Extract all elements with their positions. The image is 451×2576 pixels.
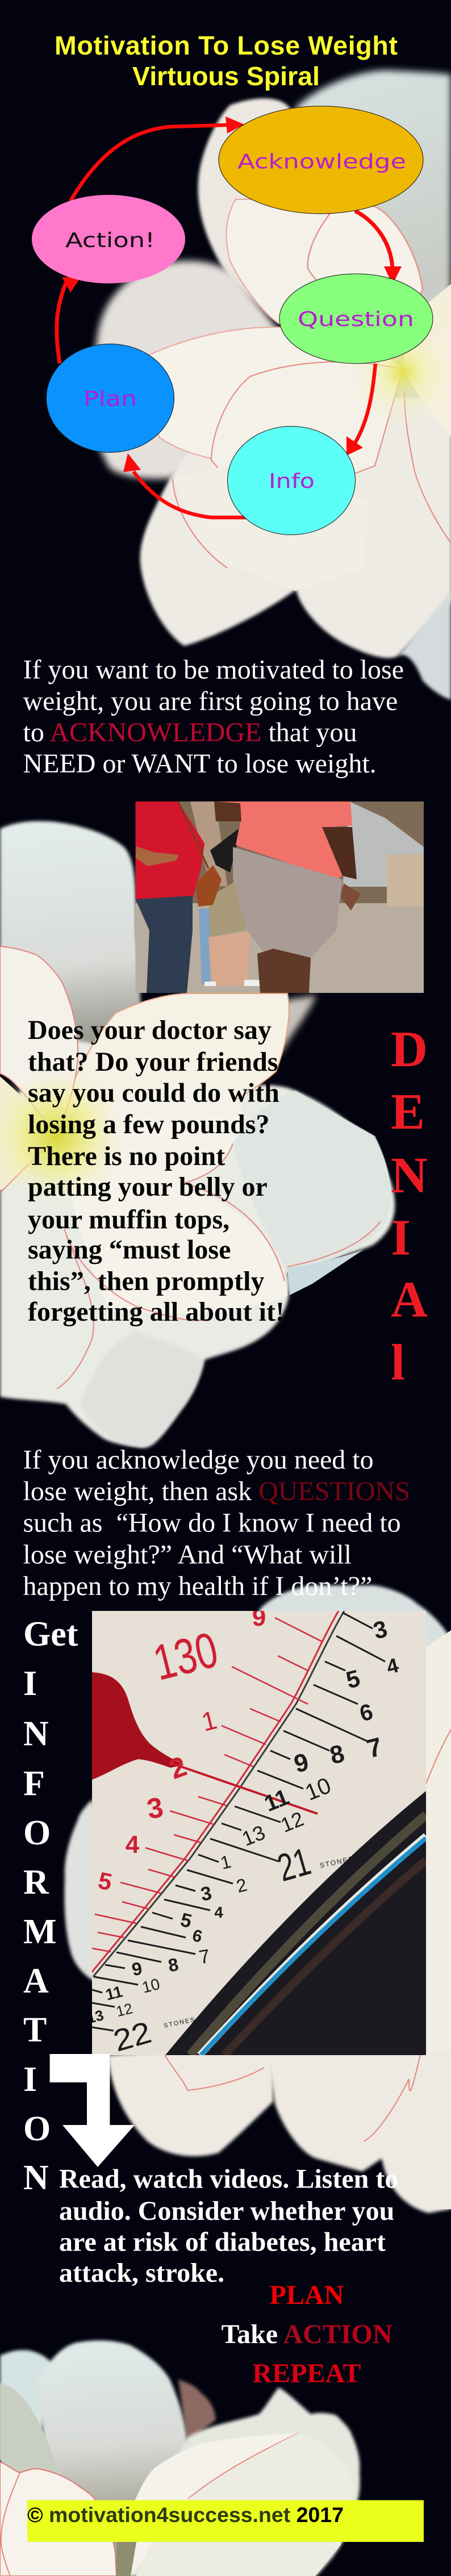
text block: questions: If you acknowledge you need to: [23, 1445, 374, 1475]
node: action: [32, 195, 185, 283]
dial numbers: 8: [327, 1739, 347, 1770]
dial numbers: 2: [234, 1874, 249, 1897]
vertical word: denial: A: [391, 1272, 428, 1328]
text block: denial questions: There is no point: [28, 1141, 225, 1171]
text block: questions: lose weight, then ask QUESTIONS: [23, 1476, 410, 1506]
title: Motivation To Lose Weight: [55, 31, 398, 60]
text block: questions: [23, 1445, 410, 1601]
vertical heading: get information: F: [23, 1764, 45, 1803]
arrow: bent white down arrow: [50, 2054, 135, 2167]
dial numbers: STONES: [163, 2016, 197, 2030]
vertical word: denial: [391, 1021, 428, 1391]
vertical heading: get information: O: [23, 2110, 51, 2148]
vertical heading: get information: I: [23, 2060, 37, 2099]
vertical word: denial: I: [391, 1210, 411, 1266]
dial numbers: 3: [370, 1615, 390, 1644]
node: question: [279, 274, 433, 364]
diagram: virtuous spiral cycle: [32, 106, 433, 535]
vertical heading: get information: O: [23, 1814, 51, 1852]
dial numbers: 6: [190, 1926, 204, 1947]
node: info: [227, 426, 356, 535]
text block: read and watch: are at risk of diabetes, heart: [59, 2227, 386, 2257]
text block: denial questions: this”, then promptly: [28, 1266, 265, 1296]
dial numbers: 6: [357, 1699, 375, 1726]
dial numbers: 1: [198, 1705, 220, 1737]
text block: plan, action, repeat: PLAN: [270, 2280, 344, 2310]
dial numbers: 13: [85, 2006, 105, 2027]
arrow: acknowledge to question: [355, 211, 402, 285]
text block: denial questions: Does your doctor say: [28, 1015, 272, 1045]
dial numbers: 3: [144, 1791, 166, 1825]
dial numbers: 9: [252, 1604, 266, 1631]
vertical heading: get information: I: [23, 1664, 37, 1703]
text block: plan, action, repeat: [222, 2280, 392, 2389]
arrow: question to info: [346, 364, 375, 456]
text block: plan, action, repeat: REPEAT: [252, 2358, 361, 2389]
background flower: bottom: [0, 2340, 360, 2576]
vertical word: denial: D: [391, 1021, 428, 1078]
dial pointer: [92, 1672, 318, 1814]
node: info: Info: [269, 470, 315, 493]
vertical heading: get information: N: [23, 1714, 49, 1753]
vertical heading: get information: A: [23, 1962, 49, 2001]
background flower: middle: [0, 821, 395, 1447]
arrow: plan to action: [57, 277, 81, 364]
dial numbers: 7: [364, 1731, 385, 1764]
dial numbers: 11: [104, 1982, 124, 2003]
text block: acknowledge: [23, 654, 404, 779]
vertical word: denial: N: [391, 1147, 428, 1204]
dial numbers: [85, 1604, 401, 2059]
node: plan: [47, 344, 174, 452]
dial numbers: 5: [178, 1909, 194, 1932]
text block: denial questions: your muffin tops,: [28, 1205, 229, 1235]
text block: questions: happen to my health if I don’t?”: [23, 1571, 372, 1601]
dial numbers: 21: [273, 1840, 315, 1890]
text block: read and watch: [59, 2164, 398, 2288]
text block: denial questions: losing a few pounds?: [28, 1109, 269, 1139]
photo: overweight people: [135, 801, 424, 993]
background flower: top: [85, 70, 451, 700]
dial numbers: 5: [343, 1664, 363, 1694]
footer: copyright bar: © motivation4success.net 2017: [27, 2503, 344, 2527]
text block: denial questions: patting your belly or: [28, 1172, 268, 1202]
vertical heading: get information: R: [23, 1863, 49, 1902]
text block: denial questions: say you could do with: [28, 1078, 279, 1108]
dial numbers: 4: [126, 1831, 140, 1859]
text block: denial questions: forgetting all about it!: [28, 1297, 285, 1327]
dial ticks: [92, 1613, 385, 2031]
vertical word: denial: E: [391, 1084, 425, 1140]
arrow: action to acknowledge: [70, 116, 244, 201]
dial numbers: 1: [218, 1851, 233, 1873]
text block: plan, action, repeat: Take ACTION: [222, 2319, 392, 2349]
text block: read and watch: Read, watch videos. Listen to: [59, 2164, 398, 2194]
dial numbers: 7: [197, 1945, 212, 1969]
vertical heading: get information: N: [23, 2159, 49, 2197]
text block: questions: such as “How do I know I need to: [23, 1508, 401, 1538]
vertical heading: get information: M: [23, 1913, 57, 1951]
dial numbers: 8: [166, 1954, 180, 1976]
text block: read and watch: audio. Consider whether you: [59, 2196, 394, 2226]
dial numbers: 130: [148, 1621, 223, 1691]
node: acknowledge: Acknowledge: [237, 150, 406, 174]
text block: questions: lose weight?” And “What will: [23, 1539, 352, 1570]
dial numbers: 5: [96, 1867, 114, 1896]
vertical heading: get information: [23, 1615, 78, 2197]
dial numbers: 22: [110, 2015, 155, 2059]
text block: denial questions: [28, 1015, 285, 1327]
node: plan: Plan: [83, 387, 137, 411]
text block: acknowledge: NEED or WANT to lose weight.: [23, 749, 377, 779]
text block: acknowledge: If you want to be motivated to lose: [23, 654, 404, 685]
dial numbers: 3: [199, 1882, 214, 1906]
dial numbers: 2: [165, 1750, 191, 1785]
dial numbers: 4: [214, 1903, 223, 1921]
footer: copyright bar: [27, 2500, 424, 2542]
text block: acknowledge: to ACKNOWLEDGE that you: [23, 717, 357, 748]
vertical heading: get information: T: [23, 2011, 47, 2049]
photo: weighing scale dial: [85, 1604, 426, 2059]
dial numbers: 10: [302, 1773, 335, 1806]
text block: denial questions: saying “must lose: [28, 1235, 231, 1265]
title: Virtuous Spiral: [132, 61, 320, 91]
node: action: Action!: [65, 229, 155, 252]
dial numbers: 4: [384, 1654, 401, 1679]
vertical word: denial: l: [391, 1335, 405, 1391]
arrow: info to plan: [123, 453, 247, 517]
text block: acknowledge: weight, you are first going to have: [23, 686, 398, 716]
text block: read and watch: attack, stroke.: [59, 2258, 224, 2288]
node: acknowledge: [219, 106, 423, 214]
title: [55, 31, 398, 91]
dial numbers: 9: [291, 1748, 311, 1778]
dial spine: [88, 1611, 344, 1977]
text block: denial questions: that? Do your friends: [28, 1047, 278, 1077]
dial numbers: 9: [130, 1958, 144, 1980]
dial numbers: 12: [114, 1999, 134, 2020]
dial numbers: 10: [140, 1975, 162, 1997]
node: question: Question: [298, 308, 414, 331]
dial numbers: 12: [277, 1807, 307, 1837]
dial numbers: 13: [239, 1821, 269, 1851]
vertical heading: get information: Get: [23, 1615, 78, 1654]
background flower: lower: [64, 1585, 451, 2213]
dial red ticks: [92, 1618, 322, 1952]
dial numbers: STONES: [319, 1855, 355, 1869]
dial numbers: 11: [261, 1785, 293, 1817]
